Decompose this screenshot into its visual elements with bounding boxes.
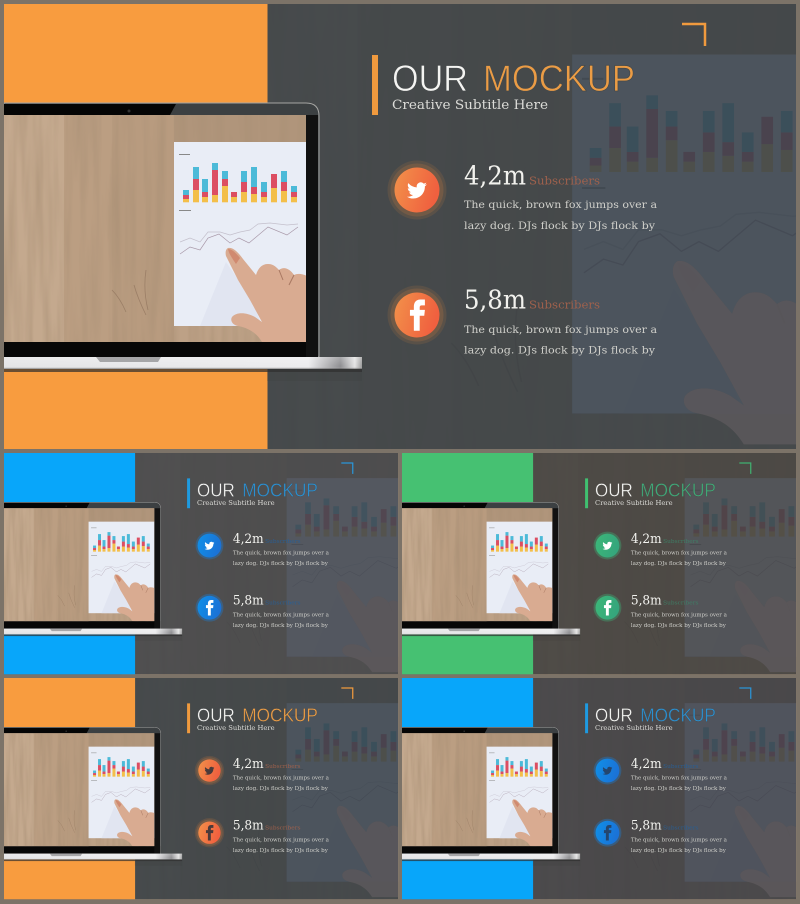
twitter item <box>195 756 329 792</box>
twitter item <box>594 532 727 567</box>
stat: subscribers <box>631 818 699 833</box>
icon: facebook <box>594 819 621 847</box>
stat: subscribers <box>234 595 300 606</box>
stat: subscribers: Subscribers <box>265 600 301 606</box>
stat: subscribers: Subscribers <box>265 539 301 545</box>
stat: subscribers: 5,8m <box>233 818 264 833</box>
stat: subscribers: Subscribers <box>663 600 699 606</box>
title: MOCKUP <box>242 479 318 500</box>
slide: small blue variant with dark icons <box>402 675 800 904</box>
description: lazy dog. DJs flock by DJs flock by <box>464 344 655 356</box>
twitter item <box>196 532 329 567</box>
facebook item <box>195 818 329 854</box>
facebook item <box>196 593 329 629</box>
title <box>595 704 716 725</box>
icon: facebook <box>594 594 621 622</box>
stat: subscribers: 5,8m <box>631 818 662 833</box>
subtitle: Creative Subtitle Here <box>392 98 548 113</box>
description: The quick, brown fox jumps over a <box>631 838 727 844</box>
stat: subscribers: 5,8m <box>464 286 526 316</box>
stat: subscribers: Subscribers <box>663 825 699 831</box>
description <box>631 550 727 567</box>
description: lazy dog. DJs flock by DJs flock by <box>631 623 726 629</box>
description: lazy dog. DJs flock by DJs flock by <box>631 561 726 567</box>
description: The quick, brown fox jumps over a <box>233 838 329 844</box>
description <box>631 838 727 854</box>
description: The quick, brown fox jumps over a <box>233 613 329 619</box>
title: OUR <box>595 479 633 500</box>
stat: subscribers <box>233 757 301 772</box>
laptop mockup <box>4 103 362 381</box>
description: lazy dog. DJs flock by DJs flock by <box>464 220 655 232</box>
title accent bar <box>187 478 190 508</box>
title: OUR <box>392 58 468 99</box>
facebook item <box>388 286 657 356</box>
accent colour panel <box>4 453 135 674</box>
stat: subscribers: Subscribers <box>529 174 600 188</box>
stat: subscribers: 4,2m <box>464 162 526 192</box>
twitter item <box>388 160 657 232</box>
stat: subscribers <box>631 757 699 772</box>
laptop mockup <box>402 727 580 866</box>
description: lazy dog. DJs flock by DJs flock by <box>631 786 726 792</box>
slide: large orange mockup <box>4 0 800 458</box>
corner bracket <box>682 24 705 46</box>
description: The quick, brown fox jumps over a <box>464 324 657 336</box>
subtitle: Creative Subtitle Here <box>197 724 275 732</box>
accent colour panel <box>4 678 135 899</box>
stat: subscribers: 4,2m <box>631 532 662 547</box>
icon: twitter <box>594 757 621 784</box>
stat: subscribers: Subscribers <box>265 764 301 770</box>
description: lazy dog. DJs flock by DJs flock by <box>233 623 328 629</box>
description <box>464 199 657 232</box>
icon: twitter <box>388 160 446 220</box>
description <box>233 550 329 567</box>
stat: subscribers <box>233 533 300 545</box>
description: The quick, brown fox jumps over a <box>631 550 727 556</box>
background photo with dark overlay <box>268 4 796 449</box>
description: lazy dog. DJs flock by DJs flock by <box>233 561 328 567</box>
slide: blue variant <box>4 450 417 679</box>
accent colour panel <box>4 4 268 449</box>
stat: subscribers <box>631 593 699 608</box>
stat: subscribers <box>233 818 301 833</box>
description: The quick, brown fox jumps over a <box>631 775 727 781</box>
stat: subscribers: 4,2m <box>233 757 264 772</box>
stat: subscribers: 4,2m <box>631 757 662 772</box>
stat: subscribers: Subscribers <box>663 764 699 770</box>
facebook item <box>594 593 727 629</box>
title <box>596 484 715 496</box>
title accent bar <box>585 703 588 733</box>
title: MOCKUP <box>242 704 318 725</box>
icon: facebook <box>196 594 223 622</box>
laptop mockup <box>4 727 182 866</box>
title <box>394 65 634 92</box>
icon: twitter <box>195 756 224 785</box>
description: lazy dog. DJs flock by DJs flock by <box>233 848 328 854</box>
subtitle: Creative Subtitle Here <box>595 499 673 507</box>
stat: subscribers: 4,2m <box>233 532 264 547</box>
title: MOCKUP <box>640 479 716 500</box>
facebook item <box>594 818 727 854</box>
description <box>631 775 727 792</box>
corner bracket <box>341 463 353 474</box>
background photo with dark overlay <box>4 675 417 904</box>
title <box>197 704 318 725</box>
slide: green variant <box>402 450 800 679</box>
stat: subscribers: Subscribers <box>529 298 600 312</box>
background photo with dark overlay <box>533 453 796 674</box>
stat: subscribers: Subscribers <box>265 825 301 831</box>
stat: subscribers <box>466 289 600 312</box>
twitter item <box>594 757 727 792</box>
icon: twitter <box>196 532 223 559</box>
stat: subscribers <box>464 165 600 188</box>
title: OUR <box>197 479 235 500</box>
slide: small orange variant <box>4 675 417 904</box>
description <box>233 775 329 792</box>
accent colour panel <box>402 453 533 674</box>
stat: subscribers <box>631 532 699 547</box>
description <box>233 613 329 629</box>
title: OUR <box>595 704 633 725</box>
laptop mockup <box>402 502 580 641</box>
description <box>631 613 727 629</box>
title: MOCKUP <box>483 58 635 99</box>
subtitle: Creative Subtitle Here <box>197 499 275 507</box>
title accent bar <box>585 478 588 508</box>
description: The quick, brown fox jumps over a <box>464 199 657 211</box>
title <box>198 484 317 496</box>
description: The quick, brown fox jumps over a <box>631 613 727 619</box>
laptop mockup <box>4 502 182 641</box>
title accent bar <box>187 703 190 733</box>
stat: subscribers: 5,8m <box>233 593 264 608</box>
subtitle: Creative Subtitle Here <box>595 724 673 732</box>
description: The quick, brown fox jumps over a <box>233 775 329 781</box>
description: lazy dog. DJs flock by DJs flock by <box>233 786 328 792</box>
title: OUR <box>197 704 235 725</box>
description: The quick, brown fox jumps over a <box>233 550 329 556</box>
description <box>233 838 329 854</box>
title: MOCKUP <box>640 704 716 725</box>
icon: facebook <box>388 286 446 344</box>
corner bracket <box>739 688 751 699</box>
title accent bar <box>372 55 378 115</box>
stat: subscribers: Subscribers <box>663 539 699 545</box>
background photo with dark overlay <box>135 453 398 674</box>
icon: facebook <box>195 818 224 847</box>
corner bracket <box>739 463 751 474</box>
stat: subscribers: 5,8m <box>631 593 662 608</box>
icon: twitter <box>594 532 621 559</box>
description: lazy dog. DJs flock by DJs flock by <box>631 848 726 854</box>
background photo with dark overlay <box>402 675 800 904</box>
description <box>464 324 657 356</box>
accent colour panel <box>402 678 533 899</box>
corner bracket <box>341 688 353 699</box>
